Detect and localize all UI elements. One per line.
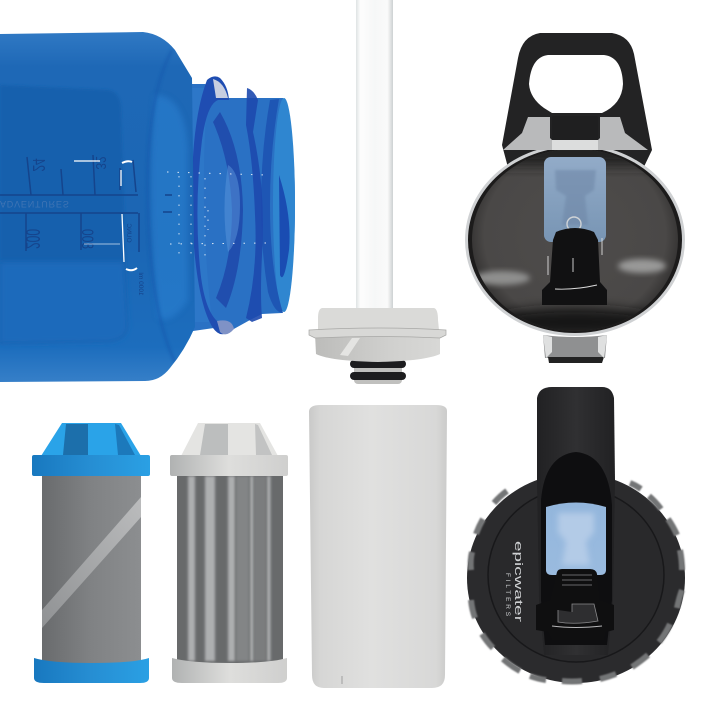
ring flange [192,76,229,334]
scale labels [0,156,144,296]
scale labels: ADVENTURES [0,199,70,209]
blue bottom cap [34,658,149,683]
filter cap with sealing rings [309,308,446,384]
blue water window [544,157,606,242]
blue filter cartridge [32,423,150,683]
carbon body [42,474,141,664]
logo text: FILTERS [504,573,511,619]
inner body panels [0,50,188,362]
bite valve [567,217,581,231]
grey filter cartridge [170,423,288,683]
cap top [318,308,439,330]
lid base [467,473,685,683]
neck inner bands [213,112,243,308]
grey top cone [181,423,278,456]
spout latch [536,569,614,640]
grey collar [170,455,288,476]
blue top cone [41,423,141,456]
filter housing cup [309,405,447,688]
flip handle [537,387,615,655]
pleated body [177,474,283,664]
grey bottom cap [172,658,287,683]
mouth [273,98,295,312]
filter tube [356,0,393,309]
blue collar [32,455,150,476]
scale labels: 24 [28,158,48,172]
diagonal wrap stripe [42,497,141,628]
logo text: epicwater [512,541,524,623]
dark lens with reflections [472,150,678,331]
scale labels: 32 [93,156,109,170]
cap flange [309,328,446,338]
clear cover body [465,144,685,336]
scale labels: 1000 ml [137,272,144,296]
lid closed view with logo [467,387,685,683]
bottle body [0,32,195,382]
sealing rings [350,358,406,384]
pleats [188,476,270,661]
scale labels: OUNC [125,223,132,243]
lower hinge [543,335,607,358]
measurement scale markings [0,155,172,252]
logo text [504,541,524,623]
scale labels: 200 [21,229,44,249]
blue water window [546,502,606,575]
lid with clear dust cover, top view [465,33,685,363]
grip ridges [471,483,682,682]
glass highlights [74,161,266,270]
clear cover clasp [503,117,648,150]
cap lower body [315,334,440,362]
bottle neck threads [186,76,295,334]
dark spout latch [542,228,607,305]
scale labels: 800 [77,229,96,249]
inner disc [488,488,664,662]
bottle: blue translucent bottle on its side [0,32,295,382]
lid handle [502,33,652,175]
